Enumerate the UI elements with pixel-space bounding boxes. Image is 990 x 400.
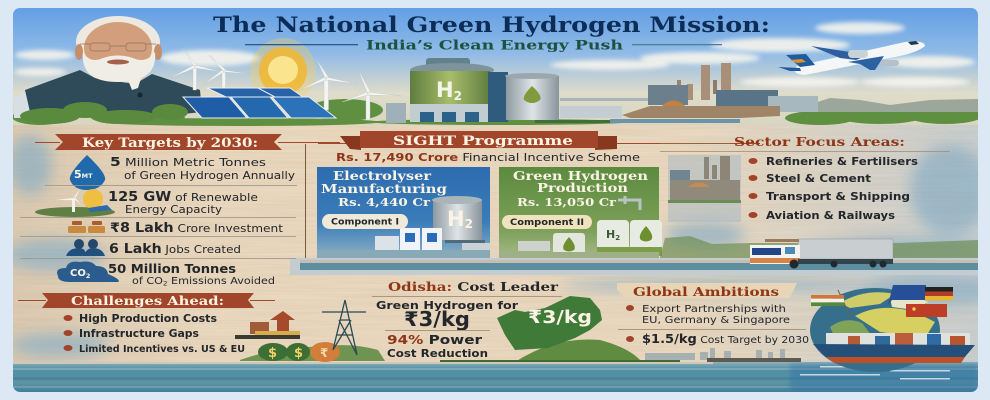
label: H2: 2 <box>454 89 462 103</box>
target: 8 lakh crore <box>68 221 283 233</box>
illustration: money bags and coin: $ <box>268 346 277 361</box>
text: green hydrogen for: Green Hydrogen for <box>376 299 519 312</box>
challenge list: Limited Incentives vs. US & EU <box>79 344 245 355</box>
sector list: Steel & Cement <box>766 172 871 185</box>
sky header band <box>13 8 978 126</box>
label: H2: H <box>436 78 454 102</box>
label: H2 on tank: H <box>606 228 615 241</box>
illustration: money bags and coin: $ <box>294 346 303 361</box>
illustration: solar panels <box>183 88 336 118</box>
component value: Rs. 13,050 Cr <box>517 196 616 209</box>
target: 50 million tonnes: Emissions Avoided <box>168 276 275 287</box>
target: 50 million tonnes: CO <box>70 268 86 279</box>
heading: key targets: Key Targets by 2030: <box>82 136 258 151</box>
target: 6 lakh jobs <box>66 239 241 257</box>
illustration: green ground <box>240 345 385 361</box>
sector list: Refineries & Fertilisers <box>766 155 918 168</box>
water at bottom <box>13 362 978 392</box>
sector list: Aviation & Railways <box>766 209 895 222</box>
heading: global banner: Global Ambitions <box>633 285 779 299</box>
road band <box>290 258 978 275</box>
illustration: front shrubs <box>20 102 188 124</box>
target: 6 lakh jobs: 6 Lakh Jobs Created <box>109 242 241 257</box>
icon: sun <box>250 38 316 104</box>
challenge list: High Production Costs <box>79 313 217 325</box>
target: 8 lakh crore: ₹8 Lakh Crore Investment <box>110 221 284 236</box>
illustration: prime minister portrait <box>14 16 202 118</box>
partnership bullet <box>626 304 790 326</box>
partnership bullet: Export Partnerships with <box>642 304 786 315</box>
target: 125 GW <box>35 189 258 217</box>
heading: SIGHT banner: SIGHT Programme <box>393 134 573 149</box>
component pill I <box>322 214 408 229</box>
heading: sector focus: Sector Focus Areas: <box>734 134 905 149</box>
sector list: Transport & Shipping <box>766 190 910 203</box>
illustration: distant port <box>645 348 801 362</box>
illustration: Odisha map <box>440 296 680 362</box>
illustration: airplane <box>778 41 925 75</box>
illustration: wind turbines <box>170 48 402 120</box>
challenge list: Infrastructure Gaps <box>79 328 199 340</box>
illustration: globe <box>810 288 940 372</box>
illustration: distant hills <box>805 98 978 112</box>
component title: Green Hydrogen <box>513 168 648 183</box>
parchment body <box>5 125 990 365</box>
title: The National Green Hydrogen Mission: <box>213 12 770 37</box>
panel: electrolyser component <box>317 167 490 258</box>
label: H2 on tank: H <box>447 207 465 231</box>
illustration: flags <box>811 285 953 318</box>
target: 50 million tonnes: 50 Million Tonnes <box>108 262 236 276</box>
label: H2 on tank: 2 <box>465 217 473 231</box>
heading: SIGHT banner <box>318 131 760 150</box>
illustration: hydrogen tank H2 <box>386 58 494 123</box>
heading: challenges banner <box>18 293 275 308</box>
component pill I: Component I <box>331 218 399 228</box>
target: 50 million tonnes: 2 <box>86 272 90 280</box>
illustration: industrial plant <box>610 63 818 123</box>
illustration: money bags and coin: ₹ <box>320 346 328 360</box>
label: H2 on tank: 2 <box>615 234 620 242</box>
divider between columns <box>305 144 306 258</box>
target: 5 million tonnes <box>70 154 295 190</box>
panel: challenges ahead <box>18 293 385 362</box>
sector list <box>748 155 918 222</box>
heading: Odisha: Odisha: Cost Leader <box>388 279 558 294</box>
illustration: factory vignette <box>668 155 741 222</box>
component title line 2: Manufacturing <box>321 181 447 196</box>
target: 50 million tonnes: 2 <box>163 280 168 288</box>
component pill II <box>502 215 592 229</box>
illustration: hydrogen storage tanks <box>499 196 662 258</box>
illustration: silver tank with drop <box>488 72 655 123</box>
challenge list <box>64 313 245 355</box>
component title line 2: Production <box>537 180 628 195</box>
panel: key targets <box>20 134 340 288</box>
panel: green hydrogen component <box>499 167 662 258</box>
target: 5 million tonnes: 5 Million Metric Tonnes <box>110 154 266 169</box>
illustration: electrolyser plant <box>317 196 490 258</box>
illustration: transmission tower <box>322 300 366 355</box>
target: 125 GW: Energy Capacity <box>125 204 222 216</box>
panel: SIGHT programme <box>317 131 760 258</box>
text: power cost: 94% Power <box>387 332 483 347</box>
illustration: Odisha map: ₹3/kg <box>528 307 592 328</box>
illustration: rising costs <box>235 311 300 339</box>
component value: Rs. 4,440 Cr <box>338 196 430 209</box>
partnership bullet: EU, Germany & Singapore <box>642 315 790 326</box>
heading: global banner <box>617 283 797 299</box>
illustration: money bags and coin <box>258 342 340 362</box>
panel: Odisha cost leader <box>372 279 680 362</box>
text: cost reduction: Cost Reduction <box>387 347 488 360</box>
target: 5 million tonnes: 5MT <box>74 168 93 181</box>
cost target bullet: $1.5/kg Cost Target by 2030 <box>642 332 809 346</box>
component title: Electrolyser <box>333 168 431 183</box>
illustration: roadside greenery <box>660 236 978 258</box>
target: 50 million tonnes: of CO <box>132 276 158 287</box>
target: 125 GW: 125 GW of Renewable <box>108 190 258 205</box>
heading: key targets <box>35 134 340 151</box>
text: price: ₹3/kg <box>404 307 470 331</box>
scheme value line: Rs. 17,490 Crore Financial Incentive Scheme <box>336 151 640 164</box>
heading: challenges banner: Challenges Ahead: <box>71 293 224 308</box>
target: 5 million tonnes: of Green Hydrogen Annually <box>124 170 295 182</box>
illustration: trees along header <box>12 98 985 126</box>
target: 50 million tonnes <box>57 262 275 288</box>
subtitle with rules: India’s Clean Energy Push <box>366 38 624 54</box>
illustration: container ship <box>813 333 975 363</box>
panel: sector focus areas <box>660 134 978 268</box>
panel: global ambitions <box>617 283 975 372</box>
component pill II: Component II <box>510 218 584 228</box>
illustration: truck <box>750 239 893 268</box>
